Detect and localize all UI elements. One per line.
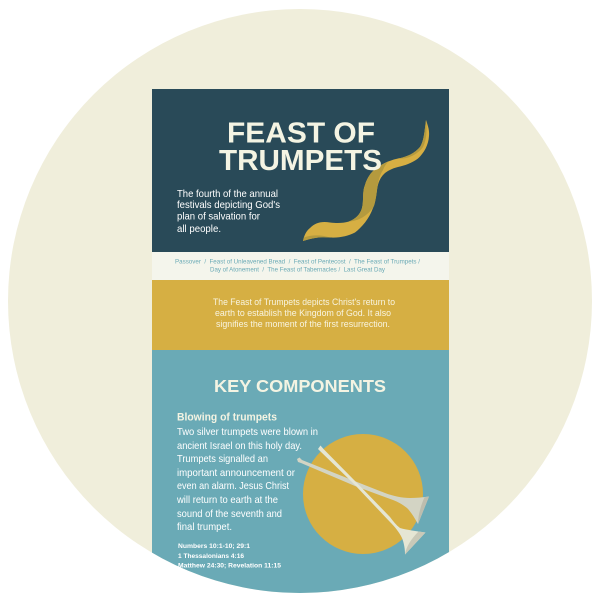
panel: summary (152, 280, 449, 350)
body text: Two silver trumpets were blown in (177, 426, 318, 438)
scripture references: Numbers 10:1-10; 29:1 (178, 543, 250, 550)
subheading: Blowing of trumpets (177, 412, 277, 424)
panel: summary: earth to establish the Kingdom of God. It also (215, 308, 391, 319)
intro text: plan of salvation for (177, 210, 260, 222)
panel: summary: The Feast of Trumpets depicts Christ's return to (213, 297, 395, 308)
title (219, 118, 382, 177)
body text: final trumpet. (177, 521, 232, 533)
heading: KEY COMPONENTS (214, 376, 386, 396)
back trumpet (297, 458, 429, 524)
body text: even an alarm. Jesus Christ (177, 480, 289, 492)
panel: festival navigation: Day of Atonement / The Feast of Tabernacles / Last Great Day (210, 266, 386, 274)
body text (176, 426, 318, 533)
panel: key components (152, 350, 449, 600)
panel: festival navigation: Passover / Feast of Unleavened Bread / Feast of Pentecost / The Feast of Trumpets / (175, 258, 420, 266)
intro text: all people. (177, 223, 221, 235)
body text: sound of the seventh and (177, 508, 282, 520)
body text: Trumpets signalled an (177, 453, 268, 465)
title: TRUMPETS (219, 145, 382, 177)
body text: important announcement or (177, 467, 295, 479)
icon: golden shofar horn (303, 120, 429, 241)
intro text: festivals depicting God's (177, 199, 280, 211)
scripture references: 1 Thessalonians 4:16 (178, 553, 244, 560)
scripture references: Matthew 24:30; Revelation 11:15 (178, 562, 281, 570)
body text: will return to earth at the (176, 494, 278, 506)
body text: ancient Israel on this holy day. (177, 440, 302, 452)
title: FEAST OF (227, 118, 375, 150)
panel: header (152, 89, 449, 252)
intro text (177, 188, 280, 235)
panel: festival navigation (152, 252, 449, 280)
panel: summary: signifies the moment of the first resurrection. (216, 319, 390, 330)
icon: crossed silver trumpets on gold circle (297, 434, 429, 554)
scripture references (178, 543, 281, 570)
front trumpet (318, 446, 426, 554)
intro text: The fourth of the annual (177, 188, 278, 200)
